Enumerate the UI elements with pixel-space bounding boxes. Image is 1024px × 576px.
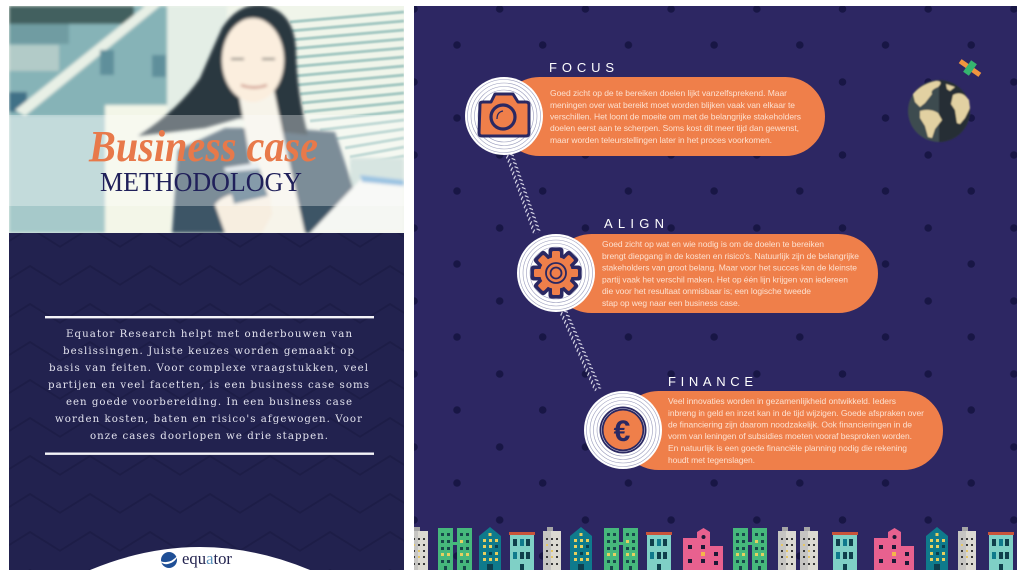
logo: equator on white arc: equator — [182, 549, 232, 568]
title: business case: Business case — [88, 122, 318, 171]
panel: focus — [465, 77, 825, 156]
text block: finance body: de financiering zijn daarom noodzakelijk. Ook financieringen in de — [668, 420, 912, 430]
panel: left column — [9, 5, 404, 570]
text block: finance body: inbreng in geld en inzet kan in de tijd wijzigen. Goede afspraken over — [668, 408, 924, 418]
heading: focus: FOCUS — [549, 60, 614, 75]
icon: satellite — [956, 55, 984, 81]
heading: finance: FINANCE — [668, 374, 753, 389]
arrow: chevron connector align to finance — [559, 309, 602, 391]
icon: euro coin — [584, 391, 662, 469]
icon: camera — [465, 77, 543, 155]
building group: first block — [438, 527, 723, 570]
text block: focus body — [550, 88, 801, 145]
text block: focus body: doelen eerst aan te scherpen. Soms kost dit meer tijd dan gewenst, — [550, 123, 799, 133]
panel: align — [517, 234, 878, 313]
text block: introduction: basis van feiten. Voor complexe vraagstukken, veel — [49, 363, 368, 374]
text block: introduction — [48, 329, 369, 442]
text block: align body — [602, 239, 859, 308]
text block: introduction: worden kosten, baten en risico's afgewogen. Voor — [55, 414, 362, 425]
hair — [138, 5, 308, 136]
icon: euro coin: € — [614, 415, 631, 448]
icon: gear — [517, 234, 595, 312]
translucent band — [9, 115, 404, 206]
text block: finance body — [668, 396, 924, 465]
text block: introduction: een goede voorbereiding. In een business case — [66, 397, 352, 408]
title: methodology: METHODOLOGY — [100, 167, 302, 197]
face — [222, 18, 284, 102]
text block: focus body: verschillen. Het loont de moeite om met de belangrijke stakeholders — [550, 112, 801, 122]
text block: finance body: houdt met tegenslagen. — [668, 455, 755, 465]
blinds stripes — [290, 12, 404, 166]
phone — [224, 163, 268, 204]
building: grey left edge — [414, 527, 428, 570]
text block: introduction: partijen en veel facetten, is een business case soms — [48, 380, 369, 391]
blazer — [172, 128, 354, 233]
text block: finance body: Veel innovaties worden in gezamenlijkheid ontwikkeld. Ieders — [668, 396, 896, 406]
divider bottom — [45, 452, 374, 455]
logo: equator on white arc — [90, 547, 310, 570]
text block: focus body: meningen over wat bereikt moet worden blijken vaak van elkaar te — [550, 100, 795, 110]
text block: introduction: beslissingen. Juiste keuzes worden gemaakt op — [63, 346, 354, 357]
icon: globe — [908, 80, 970, 142]
text block: focus body: Goed zicht op de te bereiken doelen lijkt vanzelfsprekend. Maar — [550, 88, 787, 98]
text block: align body: brengt diepgang in de kosten en risico's. Natuurlijk zijn de belangrijke — [602, 251, 859, 261]
folder — [310, 178, 404, 233]
text block: align body: stakeholders van groot belang. Maar voor het succes kan de kleinste — [602, 263, 857, 273]
text block: introduction: onze cases doorlopen we drie stappen. — [90, 431, 328, 442]
heading: align: ALIGN — [604, 216, 664, 231]
divider top — [45, 316, 374, 318]
text block: finance body: En natuurlijk is een goede financiële planning nodig die rekening — [668, 443, 907, 453]
text block: introduction: Equator Research helpt met onderbouwen van — [66, 329, 352, 340]
hand — [215, 190, 272, 233]
panel: photo of businesswoman — [9, 5, 404, 233]
building group: second block — [733, 527, 1014, 570]
arrow: chevron connector focus to align — [505, 153, 541, 235]
text block: align body: partij vaak het verschil maken. Het op één lijn krijgen van iedereen — [602, 274, 848, 284]
panel: right column background — [414, 6, 1017, 570]
text block: finance body: vorm van leningen of subsidies moeten vooraf besproken worden. — [668, 431, 912, 441]
text block: align body: die voor het resultaat onmisbaar is; een logische tweede — [602, 286, 811, 296]
city skyline — [410, 527, 1014, 570]
text block: focus body: maar worden teleurstellingen later in het proces voorkomen. — [550, 135, 772, 145]
text block: align body: stap op weg naar een business case. — [602, 298, 740, 308]
neck and shirt — [238, 90, 305, 233]
panel: navy text background — [9, 233, 404, 570]
text block: align body: Goed zicht op wat en wie nodig is om de doelen te bereiken — [602, 239, 824, 249]
panel: finance — [584, 391, 943, 470]
